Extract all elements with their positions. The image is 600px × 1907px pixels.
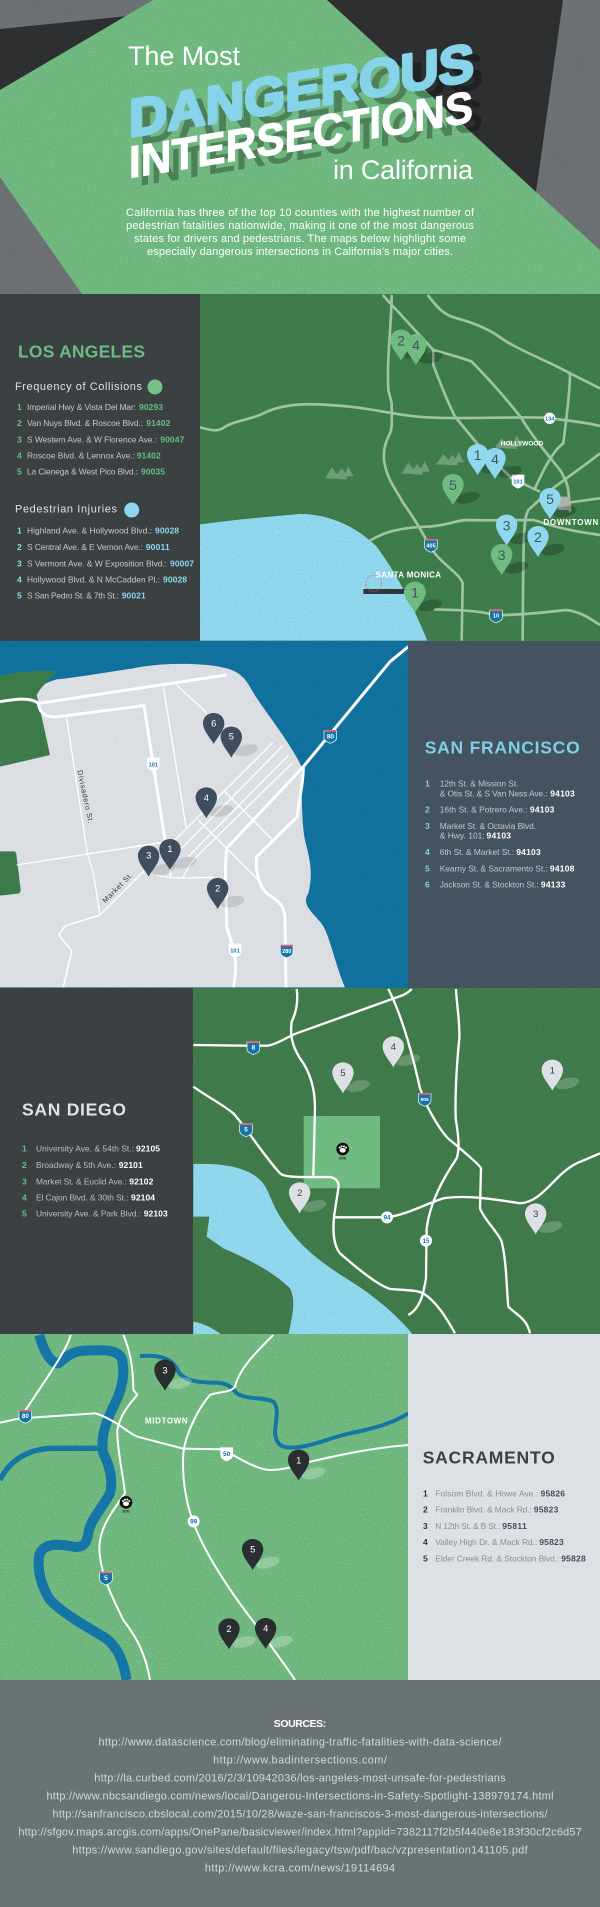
list: injuries: 1 [17, 526, 22, 536]
list: San Francisco intersections: 94133 [541, 879, 566, 889]
list: Sacramento intersections: 95823 [534, 1505, 559, 1515]
icon: zoo [120, 1496, 132, 1514]
list: injuries: S Central Ave. & E Vernon Ave.: [27, 542, 143, 552]
list: San Francisco intersections: 94103 [516, 847, 541, 857]
list: injuries: 90007 [170, 558, 194, 568]
shield: 80 [324, 730, 337, 743]
downtown building [558, 497, 570, 510]
shield: 99 [188, 1515, 200, 1527]
legend: pedestrian injuries [15, 502, 139, 518]
list: injuries: 3 [17, 558, 22, 568]
list: San Francisco intersections: 3 [425, 821, 430, 831]
pin: 4: 4 [204, 793, 209, 803]
icon: zoo: ZOO [339, 1157, 347, 1161]
list: injuries: 4 [17, 574, 22, 584]
pin: 5: 5 [340, 1068, 346, 1078]
water [193, 1164, 413, 1335]
list: San Diego intersections: 92101 [119, 1160, 143, 1170]
map: Los Angeles [200, 294, 600, 641]
shield: 50: 50 [223, 1451, 231, 1458]
list: collisions: Van Nuys Blvd. & Roscoe Blvd.: [27, 418, 143, 428]
pin: 6 [203, 713, 224, 744]
shield: 405: 405 [426, 543, 436, 549]
park north [0, 671, 56, 767]
list: San Francisco intersections: 6th St. & Market St.: [440, 847, 514, 857]
pin: injury 4: 4 [491, 451, 499, 467]
list: Sacramento intersections: 4 [423, 1537, 428, 1547]
mountains [325, 435, 523, 479]
shield: 5 [100, 1572, 112, 1585]
pin: 4 [196, 787, 234, 819]
title: INTERSECTIONS [129, 81, 473, 188]
intro paragraph: especially dangerous intersections in California's major cities. [147, 246, 453, 258]
intro paragraph: states for drivers and pedestrians. The maps below highlight some [134, 233, 466, 245]
pin: 1 [159, 839, 198, 871]
pin: 1 [542, 1060, 580, 1091]
shield: 101: 101 [513, 479, 523, 485]
roads [0, 647, 408, 987]
shield: 405 [425, 539, 437, 552]
shield: 101 south: 101 [230, 949, 240, 955]
list: source URLs: http://www.nbcsandiego.com/news/local/Dangerou-Intersections-in-Safety-Spotlight-138979174.html [46, 1790, 554, 1802]
list: injuries: 90011 [146, 542, 170, 552]
shield: 5 [240, 1123, 252, 1137]
shield: 101 [512, 475, 524, 489]
pin: 1: 1 [550, 1065, 555, 1075]
title: in California [333, 155, 474, 185]
pin: 4: 4 [263, 1624, 268, 1634]
list: injuries: 2 [17, 542, 22, 552]
shield: 134: 134 [545, 417, 555, 423]
list: San Diego intersections: 3 [22, 1176, 27, 1186]
roads [200, 295, 600, 641]
shield: 15 [420, 1235, 432, 1247]
list: San Francisco intersections: 94103 [486, 831, 511, 841]
list: San Diego intersections: El Cajon Blvd. & 30th St.: [36, 1192, 128, 1202]
pin: injury 3: 3 [503, 518, 511, 534]
list: collisions: 90035 [141, 467, 165, 477]
pin: 5 [332, 1062, 371, 1094]
pin: collision 3 [491, 544, 530, 576]
shield: 101 north [147, 758, 160, 772]
pin: collision 3: 3 [498, 547, 506, 563]
list: collisions: 90047 [160, 434, 185, 444]
shield: 134 [544, 413, 555, 424]
shield: 280: 280 [282, 949, 291, 955]
panel: Sacramento list [408, 1334, 600, 1680]
shield: 99: 99 [190, 1519, 198, 1526]
ocean [200, 514, 427, 641]
shield: 101 north: 101 [149, 763, 158, 769]
legend: frequency of collisions: Frequency of Collisions [15, 381, 142, 393]
pin: 5 [242, 1539, 281, 1571]
list: injuries: Highland Ave. & Hollywood Blvd.: [27, 526, 152, 536]
list: Sacramento intersections: 3 [423, 1521, 428, 1531]
list: Sacramento intersections: 95826 [540, 1489, 565, 1499]
legend: pedestrian injuries: Pedestrian Injuries [15, 504, 118, 516]
list: Sacramento intersections: 1 [423, 1489, 428, 1499]
pin: 5: 5 [229, 732, 234, 742]
shield: 50 [220, 1447, 233, 1461]
pin: injury 3 [496, 515, 535, 546]
pin: collision 1: 1 [411, 585, 419, 601]
list: San Diego intersections: 4 [22, 1192, 27, 1202]
heading: Sacramento: SACRAMENTO [423, 1447, 555, 1467]
shield: 5: 5 [104, 1575, 108, 1582]
label: Hollywood: HOLLYWOOD [501, 441, 544, 448]
list: injuries: S San Pedro St. & 7th St.: [27, 591, 119, 601]
land [0, 664, 345, 987]
shield: 280 [280, 945, 293, 958]
pin: 1: 1 [167, 844, 173, 854]
list: injuries: 90028 [155, 526, 179, 536]
pin: 3: 3 [162, 1365, 168, 1375]
list: source URLs: https://www.sandiego.gov/sites/default/files/legacy/tsw/pdf/bac/vzpresentation141105.pdf [72, 1844, 529, 1856]
shield: 15: 15 [422, 1238, 430, 1245]
list: collisions: 4 [17, 450, 22, 460]
pin: 1 [288, 1450, 327, 1481]
list: San Francisco intersections: & Hwy. 101: [440, 831, 485, 841]
list: San Francisco intersections: 12th St. & Mission St. [440, 779, 518, 789]
list: source URLs [18, 1736, 582, 1874]
list: source URLs: http://www.badintersections.com/ [213, 1754, 388, 1766]
list: San Francisco intersections: 6 [425, 879, 430, 889]
shield: 805 [418, 1093, 431, 1106]
park south [0, 851, 21, 896]
list: collisions: S Western Ave. & W Florence Ave.: [27, 434, 157, 444]
list: San Diego intersections: 5 [22, 1209, 27, 1219]
pin: collision 1 [404, 582, 443, 613]
list: Sacramento intersections: Elder Creek Rd. & Stockton Blvd.: [435, 1553, 559, 1563]
map: San Francisco [0, 641, 408, 988]
pin: 4 [383, 1036, 421, 1068]
list: injuries: 90028 [163, 574, 187, 584]
pin: 3: 3 [146, 851, 151, 861]
shield: 94 [381, 1211, 393, 1223]
list: injuries: 5 [17, 591, 22, 601]
list: San Francisco intersections: 94108 [550, 863, 575, 873]
list: collisions: La Cienega & West Pico Blvd.: [27, 467, 138, 477]
map: Sacramento [0, 1334, 408, 1680]
pin: 6: 6 [211, 719, 216, 729]
list: collisions: 2 [17, 418, 22, 428]
intro paragraph [126, 207, 475, 258]
heading: sources: SOURCES: [274, 1718, 326, 1730]
pin: collision 2: 2 [397, 333, 405, 349]
pin: 5 [221, 727, 259, 758]
pin: 2: 2 [226, 1624, 232, 1634]
shield: 80 [19, 1410, 32, 1423]
label: Midtown: MIDTOWN [145, 1416, 188, 1425]
list: source URLs: http://www.kcra.com/news/19114694 [205, 1862, 395, 1874]
pin: 5: 5 [250, 1545, 255, 1555]
list: collisions [17, 402, 185, 477]
list: San Francisco intersections: 5 [425, 863, 430, 873]
river [0, 1335, 408, 1680]
list: Sacramento intersections: Folsom Blvd. & Howe Ave.: [435, 1489, 538, 1499]
pin: collision 5: 5 [449, 477, 457, 493]
label: Santa Monica: SANTA MONICA [376, 570, 441, 579]
shield: 5: 5 [244, 1126, 248, 1133]
icon: zoo: ZOO [122, 1510, 130, 1514]
pin: injury 5 [539, 488, 578, 520]
list: Sacramento intersections: 2 [423, 1505, 428, 1515]
list: Sacramento intersections: 95823 [539, 1537, 564, 1547]
pin: 4 [255, 1618, 294, 1650]
pin: 3: 3 [533, 1209, 538, 1219]
list: San Diego intersections: 92103 [144, 1209, 168, 1219]
list: San Diego intersections: 2 [22, 1160, 27, 1170]
title: The Most [128, 41, 240, 71]
list: collisions: Imperial Hwy & Vista Del Mar: [27, 402, 136, 412]
pin: 4: 4 [391, 1042, 396, 1052]
pin: 2: 2 [215, 884, 220, 894]
list: San Diego intersections: University Ave. & Park Blvd.: [36, 1209, 141, 1219]
list: Sacramento intersections: 5 [423, 1553, 428, 1563]
street label: Market St.: Market St. [100, 871, 135, 905]
shield: 8: 8 [252, 1044, 256, 1051]
list: San Francisco intersections: Jackson St. & Stockton St.: [440, 879, 539, 889]
street label: Divisadero St.: Divisadero St. [75, 769, 95, 824]
list: San Francisco intersections: 2 [425, 804, 430, 814]
legend: frequency of collisions [15, 380, 162, 394]
list: San Francisco intersections: 1 [425, 779, 430, 789]
pin: 2 [207, 878, 246, 910]
pin: injury 2: 2 [534, 529, 542, 545]
shield: 805: 805 [421, 1097, 429, 1103]
shield: 94: 94 [383, 1215, 391, 1222]
list: collisions: 5 [17, 467, 22, 477]
pin: injury 4 [484, 448, 523, 480]
shield: 10: 10 [493, 614, 499, 620]
header background [0, 0, 600, 294]
list: San Diego intersections: 1 [22, 1144, 27, 1154]
pin: collision 4 [405, 334, 444, 366]
list: San Diego intersections: 92105 [136, 1144, 160, 1154]
map: San Diego [193, 988, 600, 1335]
list: San Diego intersections: University Ave. & 54th St.: [36, 1144, 134, 1154]
list: San Francisco intersections: Market St. & Octavia Blvd. [440, 821, 536, 831]
list: source URLs: http://la.curbed.com/2016/2/3/10942036/los-angeles-most-unsafe-for-pedestrians [94, 1772, 506, 1784]
pin: collision 5 [442, 474, 481, 506]
panel: Los Angeles list [0, 294, 200, 641]
list: Sacramento intersections [423, 1489, 586, 1563]
list: injuries [17, 526, 194, 601]
roads [193, 989, 600, 1333]
shield: 80: 80 [327, 733, 334, 740]
list: collisions: 91402 [137, 450, 161, 460]
panel: sources [0, 1680, 600, 1907]
pin: 3 [138, 846, 177, 877]
icon: zoo [336, 1143, 349, 1161]
shield: 10 [490, 610, 502, 623]
title: DANGEROUS [129, 33, 474, 149]
intro paragraph: California has three of the top 10 counties with the highest number of [126, 207, 475, 219]
pin: injury 2 [527, 526, 566, 558]
list: collisions: Roscoe Blvd. & Lennox Ave.: [27, 450, 135, 460]
list: San Francisco intersections: 16th St. & Potrero Ave.: [440, 804, 528, 814]
list: collisions: 1 [17, 402, 22, 412]
list: injuries: Hollywood Blvd. & N McCadden Pl.: [27, 574, 160, 584]
shield: 8 [247, 1041, 260, 1055]
pin: collision 2 [390, 330, 429, 361]
pin: 2 [218, 1618, 257, 1650]
heading: San Francisco: SAN FRANCISCO [425, 737, 580, 757]
list: collisions: 90293 [139, 402, 163, 412]
list: San Diego intersections [22, 1144, 168, 1219]
list: collisions: 3 [17, 434, 22, 444]
pin: injury 1: 1 [474, 447, 482, 463]
list: San Francisco intersections: & Otis St. & S Van Ness Ave.: [440, 788, 548, 798]
shield: 80: 80 [22, 1413, 29, 1420]
zoo park [304, 1116, 380, 1188]
list: source URLs: http://sfgov.maps.arcgis.com/apps/OnePane/basicviewer/index.html?appid=7382117f2b5f440e8e183f30cf2c6d57 [18, 1826, 582, 1838]
pin: 1: 1 [296, 1455, 301, 1465]
panel: San Francisco list [408, 641, 600, 988]
list: San Francisco intersections: 4 [425, 847, 430, 857]
pin: injury 1 [467, 444, 506, 476]
list: San Diego intersections: Broadway & 5th Ave.: [36, 1160, 116, 1170]
list: San Francisco intersections: 94103 [530, 804, 555, 814]
title: INTERSECTIONS [139, 89, 483, 196]
pier [363, 575, 404, 594]
list: San Diego intersections: 92104 [131, 1192, 155, 1202]
title [128, 33, 484, 196]
pin: 2: 2 [297, 1188, 302, 1198]
list: San Diego intersections: Market St. & Euclid Ave.: [36, 1176, 127, 1186]
list: San Diego intersections: 92102 [129, 1176, 154, 1186]
list: source URLs: http://www.datascience.com/blog/eliminating-traffic-fatalities-with-data-science/ [98, 1736, 502, 1748]
list: San Francisco intersections: 94103 [550, 788, 575, 798]
intro paragraph: pedestrian fatalities nationwide, making it one of the most dangerous [126, 220, 474, 232]
list: San Francisco intersections [425, 779, 575, 889]
pin: 2 [289, 1182, 328, 1214]
list: San Francisco intersections: Kearny St. & Sacramento St.: [440, 863, 548, 873]
list: injuries: S Vermont Ave. & W Exposition Blvd.: [27, 558, 167, 568]
pin: 3 [525, 1203, 564, 1235]
list: Sacramento intersections: Franklin Blvd. & Mack Rd.: [435, 1505, 532, 1515]
title: DANGEROUS [139, 41, 484, 157]
heading: Los Angeles: LOS ANGELES [18, 342, 145, 362]
pin: injury 5: 5 [546, 491, 554, 507]
panel: San Diego list [0, 988, 193, 1334]
heading: San Diego: SAN DIEGO [22, 1100, 126, 1120]
list: Sacramento intersections: Valley High Dr. & Mack Rd.: [435, 1537, 537, 1547]
pin: 3 [154, 1360, 193, 1391]
label: Downtown: DOWNTOWN [543, 518, 599, 527]
roads [0, 1335, 408, 1680]
list: Sacramento intersections: N 12th St. & B St.: [435, 1521, 500, 1531]
list: source URLs: http://sanfrancisco.cbslocal.com/2015/10/28/waze-san-franciscos-3-most-dangerous-intersections/ [52, 1808, 548, 1820]
list: Sacramento intersections: 95811 [502, 1521, 527, 1531]
list: Sacramento intersections: 95828 [561, 1553, 586, 1563]
shield: 101 south [229, 944, 241, 958]
list: injuries: 90021 [122, 591, 146, 601]
list: collisions: 91402 [146, 418, 171, 428]
pin: collision 4: 4 [412, 337, 420, 353]
